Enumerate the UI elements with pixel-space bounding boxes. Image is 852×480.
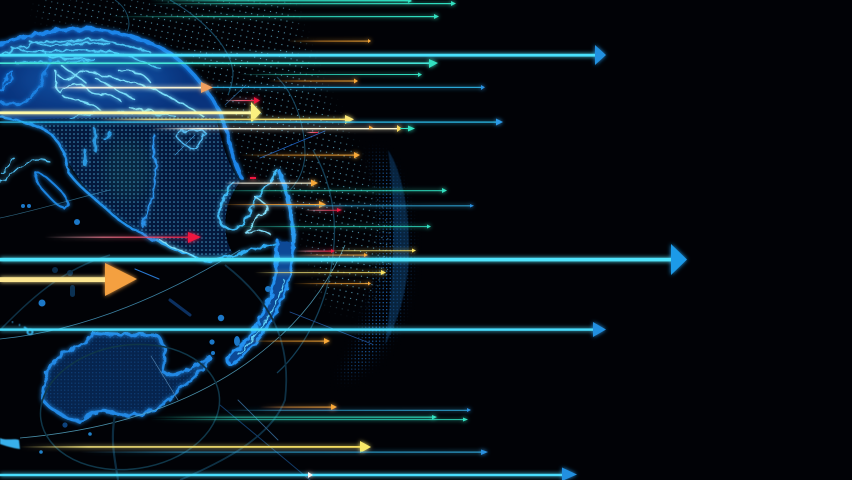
arrow: large blue 259 xyxy=(0,244,687,275)
arrow: white small 475 xyxy=(308,472,313,478)
great lakes xyxy=(175,130,205,149)
arrow: red 100 xyxy=(225,97,260,104)
bright bottom left island xyxy=(0,438,20,449)
arrow: teal 226 xyxy=(230,224,431,228)
right limb dot band xyxy=(337,148,418,384)
arrow: large yellow 112 xyxy=(0,102,261,123)
arrow: orange 155 xyxy=(240,152,360,158)
northern south america limb xyxy=(280,172,294,242)
arrow: red small 177 xyxy=(250,177,256,179)
alaska shape xyxy=(0,72,13,90)
arrow: white yellow 128 xyxy=(150,125,402,132)
arrow: blue 329 xyxy=(0,322,606,337)
arrow: red 251 xyxy=(295,249,335,253)
arrow: teal 417 xyxy=(150,415,437,420)
arrow: orange 407 xyxy=(260,404,337,410)
gulf coast xyxy=(142,135,156,226)
north coast arc xyxy=(0,29,242,178)
outer sphere dot field xyxy=(32,0,400,318)
central america xyxy=(157,240,277,261)
streak accents xyxy=(135,85,372,480)
arrow: orange 283 xyxy=(293,282,371,286)
north land highlight xyxy=(15,54,175,106)
arrow: orange 81 xyxy=(268,78,358,84)
arrow: teal 63 xyxy=(0,59,438,68)
west mountains xyxy=(0,60,50,104)
dense dots: continent interior xyxy=(0,117,240,257)
globe xyxy=(0,0,418,480)
orbit rings xyxy=(0,0,345,480)
west coast xyxy=(0,117,157,240)
arrow: red 132 xyxy=(306,132,318,133)
south america crescent xyxy=(228,240,293,365)
arrow: teal top 1 xyxy=(150,0,412,3)
arrow: yellow 447 xyxy=(20,441,371,453)
continent fill xyxy=(43,333,210,422)
continent coast xyxy=(43,333,210,422)
arrow: teal 190 xyxy=(200,188,447,193)
continent interior xyxy=(0,117,240,257)
arrow: blue 87 xyxy=(200,85,485,90)
bright line to arctic edge xyxy=(15,60,175,118)
southern continent xyxy=(0,333,210,454)
arrow: yellow 272 xyxy=(255,270,386,275)
arrow: blue 452 xyxy=(80,450,488,455)
arrow: teal 16 xyxy=(110,14,439,19)
arrow: yellow 250 xyxy=(330,248,416,252)
arrow: pink red 237 xyxy=(45,232,201,243)
baja xyxy=(36,172,68,208)
arrow: teal top 2 xyxy=(150,1,456,6)
arrow: yellow 119 xyxy=(100,115,354,124)
scattered pacific islands xyxy=(21,204,271,355)
arrow: teal 419 xyxy=(150,418,468,422)
arrow: large orange 279 xyxy=(0,263,137,296)
arrow: blue 410 xyxy=(220,408,471,412)
small chain of islands xyxy=(12,322,32,334)
canadian archipelago xyxy=(55,66,205,118)
arrow: teal 74 xyxy=(240,72,422,77)
inland lakes xyxy=(85,130,110,165)
arrow: blue 475 xyxy=(0,468,577,480)
arrow: orange 127 xyxy=(369,126,373,130)
north land mass: bright northern half xyxy=(0,29,222,130)
right limb glow band xyxy=(385,150,409,345)
arrow: teal 128 xyxy=(400,126,415,132)
green dot highlight xyxy=(104,140,152,200)
arrow: orange 255 xyxy=(295,253,368,257)
arrow: blue 122 xyxy=(0,118,503,126)
coastlines: glow group xyxy=(0,29,294,365)
arrow: orange 183 xyxy=(225,180,318,186)
arrow: orange 341 xyxy=(250,338,330,344)
arrow: orange 204 xyxy=(220,201,326,208)
aleutians xyxy=(0,158,50,182)
arctic detail xyxy=(0,39,160,68)
arrow: orange 41 xyxy=(288,39,371,43)
arrow: red 210 xyxy=(305,208,342,212)
arrow: white orange 87 xyxy=(50,82,213,93)
arrow: large blue 55 xyxy=(0,45,606,65)
arrow: blue 205 xyxy=(230,204,474,208)
caribbean loop xyxy=(219,170,277,229)
